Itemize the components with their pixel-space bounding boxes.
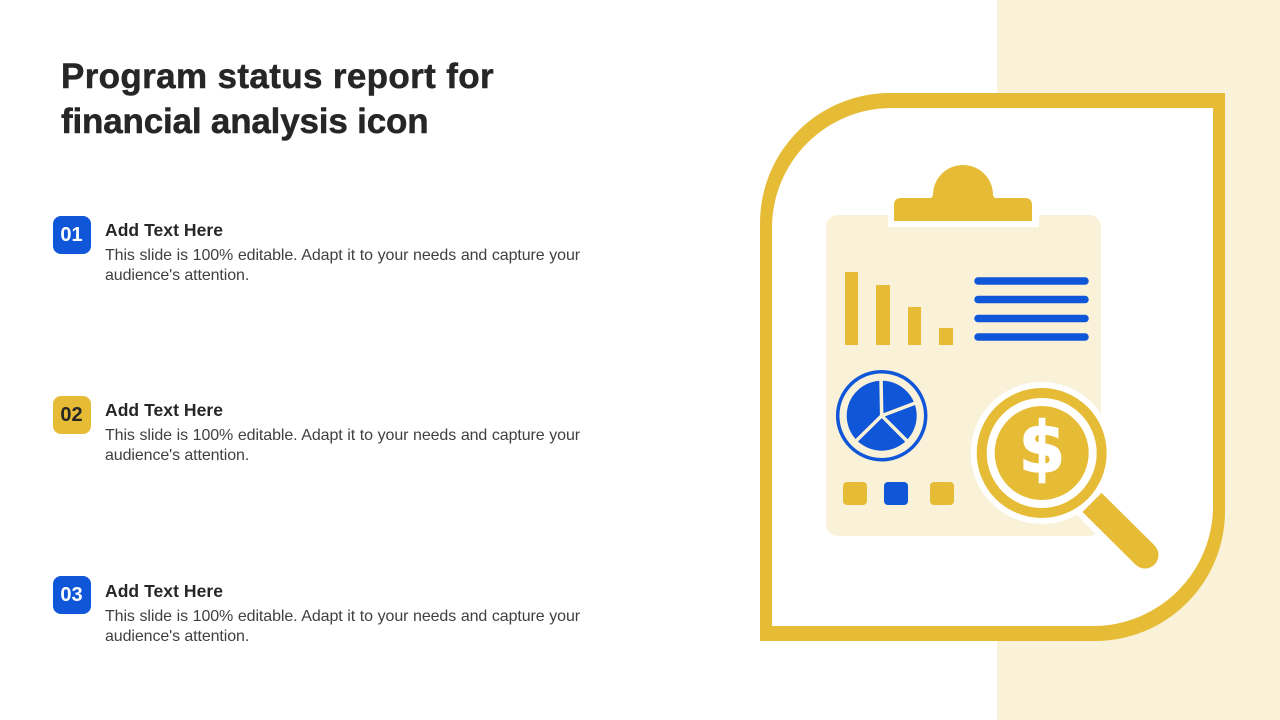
list item 01 [53, 216, 580, 284]
legend squares [843, 482, 954, 505]
text block 02: This slide is 100% editable. Adapt it to your needs and capture your audience's attention. [105, 427, 580, 464]
list item 03 [53, 576, 580, 644]
title [61, 57, 494, 141]
title: Program status report for [61, 57, 494, 96]
text block 03: This slide is 100% editable. Adapt it to your needs and capture your audience's attention. [105, 608, 580, 644]
icon: magnifying glass with dollar [971, 382, 1158, 568]
text lines [978, 281, 1085, 337]
badge 01 [53, 216, 91, 254]
badge 02 [53, 396, 91, 434]
heading 03: Add Text Here [105, 581, 223, 601]
title: financial analysis icon [61, 102, 428, 141]
text block 01: This slide is 100% editable. Adapt it to your needs and capture your audience's attention. [105, 247, 580, 284]
list item 02 [53, 396, 580, 464]
bar chart [845, 272, 953, 345]
heading 01: Add Text Here [105, 220, 223, 240]
badge 01: 01 [60, 224, 83, 246]
icon: clipboard clip [894, 165, 1032, 221]
dollar sign: $ [1019, 408, 1065, 489]
panel: rounded gold frame [760, 93, 1225, 641]
badge 03: 03 [60, 584, 83, 606]
icon: clipboard board [826, 205, 1101, 536]
badge 03 [53, 576, 91, 614]
pie chart [838, 372, 926, 460]
panel: right background band [997, 0, 1280, 720]
heading 02: Add Text Here [105, 400, 223, 420]
badge 02: 02 [60, 404, 83, 426]
